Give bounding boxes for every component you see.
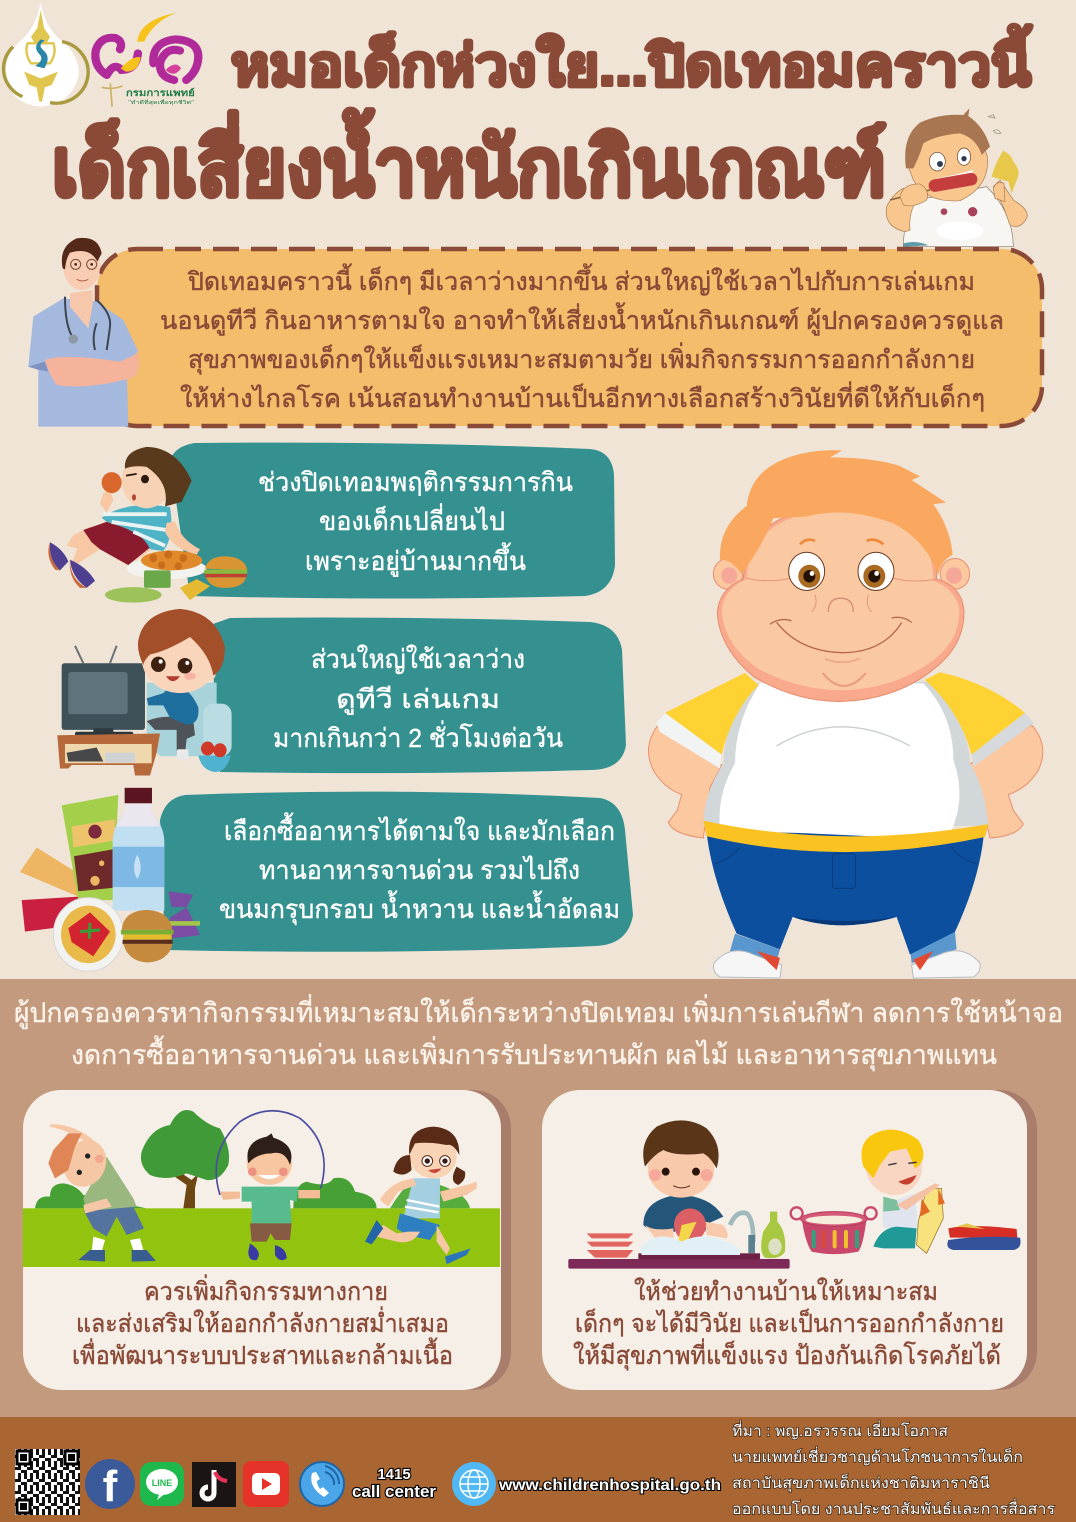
panel 1 text: เพราะอยู่บ้านมากขึ้น <box>305 542 526 577</box>
teal panel 3 <box>160 792 633 952</box>
panel 2 text <box>273 644 563 753</box>
section background <box>0 979 1076 1417</box>
intro text: ปิดเทอมคราวนี้ เด็กๆ มีเวลาว่างมากขึ้น ส่วนใหญ่ใช้เวลาไปกับการเล่นเกม <box>187 263 975 296</box>
panel 3 text: เลือกซื้ออาหารได้ตามใจ และมักเลือก <box>224 812 615 846</box>
source credits <box>732 1420 1055 1518</box>
intro box frame <box>97 249 1042 426</box>
panel: intro box <box>97 249 1042 426</box>
card text: เพื่อพัฒนาระบบประสาทและกล้ามเนื้อ <box>72 1337 453 1370</box>
card body <box>542 1090 1027 1390</box>
card text: ให้ช่วยทำงานบ้านให้เหมาะสม <box>634 1277 938 1306</box>
card text <box>72 1274 453 1370</box>
call center label: call center <box>352 1482 436 1501</box>
card text: และส่งเสริมให้ออกกำลังกายสม่ำเสมอ <box>76 1306 449 1338</box>
panel 2 text: ส่วนใหญ่ใช้เวลาว่าง <box>311 644 525 674</box>
icon: phone <box>300 1462 344 1506</box>
icon: globe <box>452 1462 496 1506</box>
title line 2: เด็กเสี่ยงน้ำหนักเกินเกณฑ์ <box>52 109 886 212</box>
panel 3 text: ทานอาหารจานด่วน รวมไปถึง <box>259 855 580 885</box>
illustration: children exercising <box>23 1110 500 1267</box>
advice text: งดการซื้ออาหารจานด่วน และเพิ่มการรับประทานผัก ผลไม้ และอาหารสุขภาพแทน <box>71 1035 997 1072</box>
panel: parent advice section <box>0 979 1076 1417</box>
icon: LINE <box>140 1462 184 1506</box>
advice text: ผู้ปกครองควรหากิจกรรมที่เหมาะสมให้เด็กระหว่างปิดเทอม เพิ่มการเล่นกีฬา ลดการใช้หน้าจอ <box>14 994 1063 1029</box>
logo: department seal <box>4 3 88 107</box>
call center label: 1415 <box>377 1466 411 1483</box>
icon: Facebook <box>85 1459 135 1511</box>
panel 1 text: ของเด็กเปลี่ยนไป <box>319 503 505 536</box>
card text: เด็กๆ จะได้มีวินัย และเป็นการออกกำลังกาย <box>575 1308 1004 1338</box>
illustration: boy eating sausage <box>886 108 1027 247</box>
illustration: snacks, drink and fast food <box>20 788 200 971</box>
footer bar <box>0 1417 1076 1522</box>
source credits: ออกแบบโดย งานประชาสัมพันธ์และการสื่อสาร <box>732 1498 1055 1518</box>
card shadow <box>553 1090 1037 1390</box>
panel 3 text: ขนมกรุบกรอบ น้ำหวาน และน้ำอัดลม <box>219 890 620 925</box>
illustration: boy eating fast food <box>48 447 247 603</box>
logo: 83rd anniversary mark: กรมการแพทย์ <box>126 87 195 99</box>
illustration: boy watching TV <box>57 609 232 776</box>
source credits: ที่มา : พญ.อรวรรณ เอี่ยมโอภาส <box>732 1420 948 1440</box>
illustration: children doing chores <box>568 1120 1021 1269</box>
card: household chores <box>542 1090 1037 1390</box>
card text <box>573 1277 1004 1371</box>
QR code <box>15 1449 80 1515</box>
source credits: สถาบันสุขภาพเด็กแห่งชาติมหาราชินี <box>732 1473 990 1493</box>
panel 1 text: ช่วงปิดเทอมพฤติกรรมการกิน <box>258 467 573 497</box>
logo: 83rd anniversary mark: "ทำดีที่สุดเพื่อทุกชีวิต" <box>128 99 194 106</box>
intro text: สุขภาพของเด็กๆให้แข็งแรงเหมาะสมตามวัย เพิ่มกิจกรรมการออกกำลังกาย <box>188 342 975 375</box>
card body <box>23 1090 501 1390</box>
panel 3 text <box>219 812 620 925</box>
title line 1: หมอเด็กห่วงใย...ปิดเทอมคราวนี้ <box>231 25 1032 97</box>
illustration: chubby boy <box>649 450 1043 978</box>
panel: behaviour change card <box>170 443 615 598</box>
panel 2 text: มากเกินกว่า 2 ชั่วโมงต่อวัน <box>273 720 563 753</box>
panel 1 text <box>258 467 573 577</box>
logo: 83rd anniversary mark <box>95 13 198 107</box>
icon: YouTube <box>243 1461 289 1507</box>
card shadow <box>34 1090 511 1390</box>
icon: TikTok <box>192 1462 236 1507</box>
intro text: ให้ห่างไกลโรค เน้นสอนทำงานบ้านเป็นอีกทางเลือกสร้างวินัยที่ดีให้กับเด็กๆ <box>180 381 985 413</box>
card text: ให้มีสุขภาพที่แข็งแรง ป้องกันเกิดโรคภัยได้ <box>573 1338 1001 1371</box>
advice text <box>14 994 1063 1072</box>
icon: Facebook: f <box>103 1462 118 1511</box>
panel: food choice card <box>160 792 633 952</box>
card text: ควรเพิ่มกิจกรรมทางกาย <box>144 1274 388 1306</box>
intro text: นอนดูทีวี กินอาหารตามใจ อาจทำให้เสี่ยงน้ำหนักเกินเกณฑ์ ผู้ปกครองควรดูแล <box>160 302 1004 336</box>
teal panel 2 <box>210 618 626 773</box>
panel: screen time card <box>210 618 626 773</box>
panel 2 text: ดูทีวี เล่นเกม <box>336 684 500 715</box>
source credits: นายแพทย์เชี่ยวชาญด้านโภชนาการในเด็ก <box>732 1446 1023 1466</box>
teal panel 1 <box>170 443 615 598</box>
call center label <box>352 1466 436 1501</box>
icon: LINE: LINE <box>152 1478 172 1488</box>
card: physical activity <box>23 1090 511 1390</box>
illustration: doctor <box>28 238 139 427</box>
website url: www.childrenhospital.go.th <box>498 1477 721 1494</box>
intro text <box>160 263 1004 413</box>
